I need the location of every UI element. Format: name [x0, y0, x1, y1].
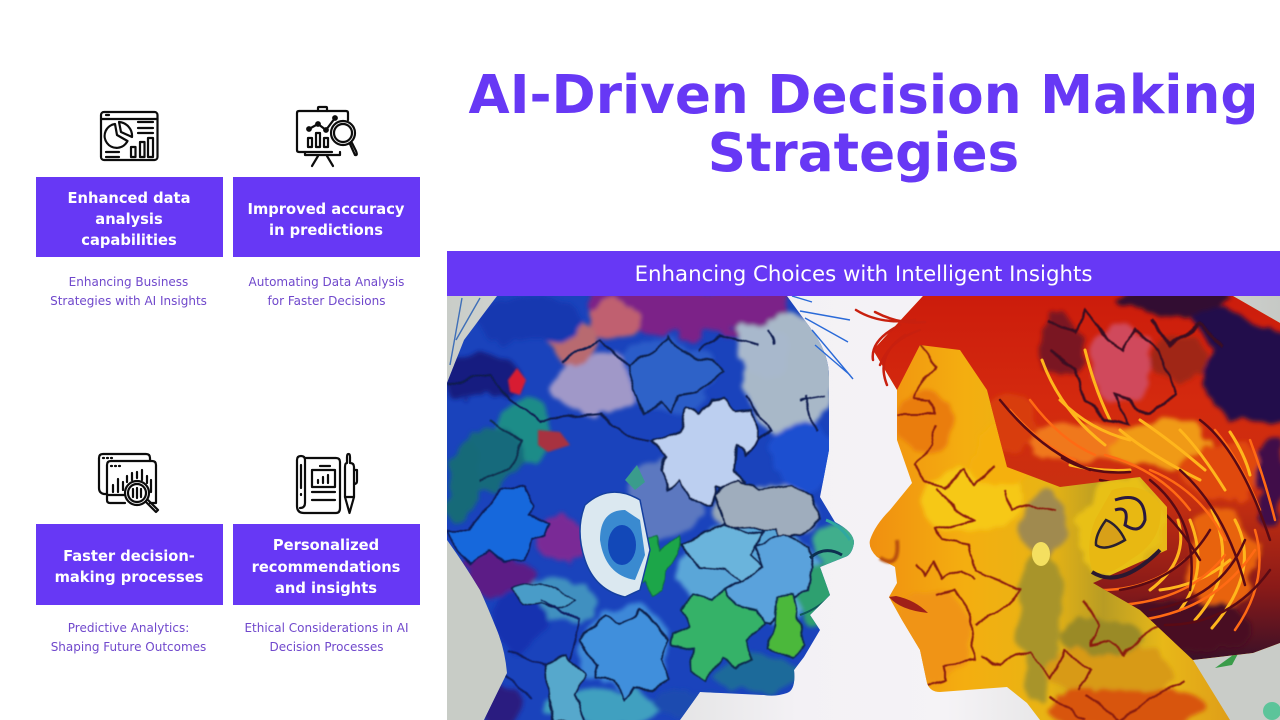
caption: ethical considerations: Ethical Considerations in AI: [244, 621, 409, 635]
card: enhanced data analysis: capabilities: [81, 232, 177, 249]
red accent: [508, 368, 526, 395]
puzzle piece: top star: [628, 335, 722, 415]
caption: ethical considerations: [244, 621, 409, 654]
orange ear: [1089, 487, 1161, 578]
orange face: [860, 288, 1280, 720]
card: enhanced data analysis: analysis: [95, 211, 163, 228]
card: faster decision-making: [36, 524, 222, 604]
blue ear: [580, 465, 650, 597]
caption: business strategies: Enhancing Business: [69, 275, 188, 289]
card: improved accuracy: in predictions: [269, 222, 383, 239]
card: personalized recommendations: and insights: [275, 580, 377, 597]
hair mass: [860, 288, 1280, 660]
puzzle piece: left blue star: [447, 487, 550, 565]
title: [468, 64, 1258, 184]
caption: predictive analytics: Predictive Analytics:: [68, 621, 189, 635]
puzzle piece: bright green lip block: [768, 595, 804, 660]
blue face: [438, 290, 867, 720]
card: improved accuracy: [232, 176, 420, 257]
puzzle piece: light blue: [680, 525, 763, 580]
puzzle piece: white-blue snowflake: [652, 398, 760, 505]
caption: business strategies: [50, 275, 207, 308]
hair strands: [1042, 350, 1250, 628]
caption: automating data analysis: [248, 275, 404, 308]
title: Strategies: [708, 122, 1019, 184]
illustration: two puzzle-piece faces: [447, 296, 1280, 720]
card: faster decision-making: making processes: [55, 569, 203, 586]
card: faster decision-making: Faster decision-: [63, 548, 195, 565]
blue hair wisps: [450, 296, 853, 379]
caption: automating data analysis: for Faster Decisions: [268, 294, 385, 308]
puzzle piece: lower blue star: [580, 610, 670, 700]
caption: ethical considerations: Decision Processes: [269, 640, 384, 654]
orange lips and cheek highlight: [880, 540, 1050, 613]
card: enhanced data analysis: Enhanced data: [68, 190, 190, 207]
card: enhanced data analysis: [36, 176, 222, 257]
caption: predictive analytics: Shaping Future Outcomes: [51, 640, 206, 654]
card: personalized recommendations: recommendations: [252, 559, 400, 576]
puzzle piece: small green by ear: [642, 534, 682, 598]
puzzle piece: teal side: [510, 583, 575, 608]
caption: business strategies: Strategies with AI Insights: [50, 294, 207, 308]
puzzle outlines upper: [447, 330, 825, 455]
puzzle piece: pale blue cheek: [725, 535, 812, 625]
puzzle piece: pale lower left: [545, 655, 585, 720]
card: personalized recommendations: [232, 524, 420, 604]
subtitle banner: Enhancing Choices with Intelligent Insights: [635, 262, 1092, 287]
front hair wisps: [856, 310, 925, 385]
caption: automating data analysis: Automating Data Analysis: [249, 275, 404, 289]
hair puzzle outlines: [1048, 310, 1222, 425]
puzzle piece: grey block: [714, 478, 820, 540]
card: personalized recommendations: Personalized: [273, 537, 379, 554]
nose shadow and lips: [810, 551, 842, 558]
card: improved accuracy: Improved accuracy: [248, 201, 404, 218]
caption: predictive analytics: [51, 621, 206, 654]
puzzle piece: green star: [670, 590, 765, 680]
subtitle banner: [447, 251, 1280, 296]
background paper: [447, 296, 1280, 720]
orange puzzle lines: [897, 345, 1185, 720]
title: AI-Driven Decision Making: [469, 64, 1258, 126]
